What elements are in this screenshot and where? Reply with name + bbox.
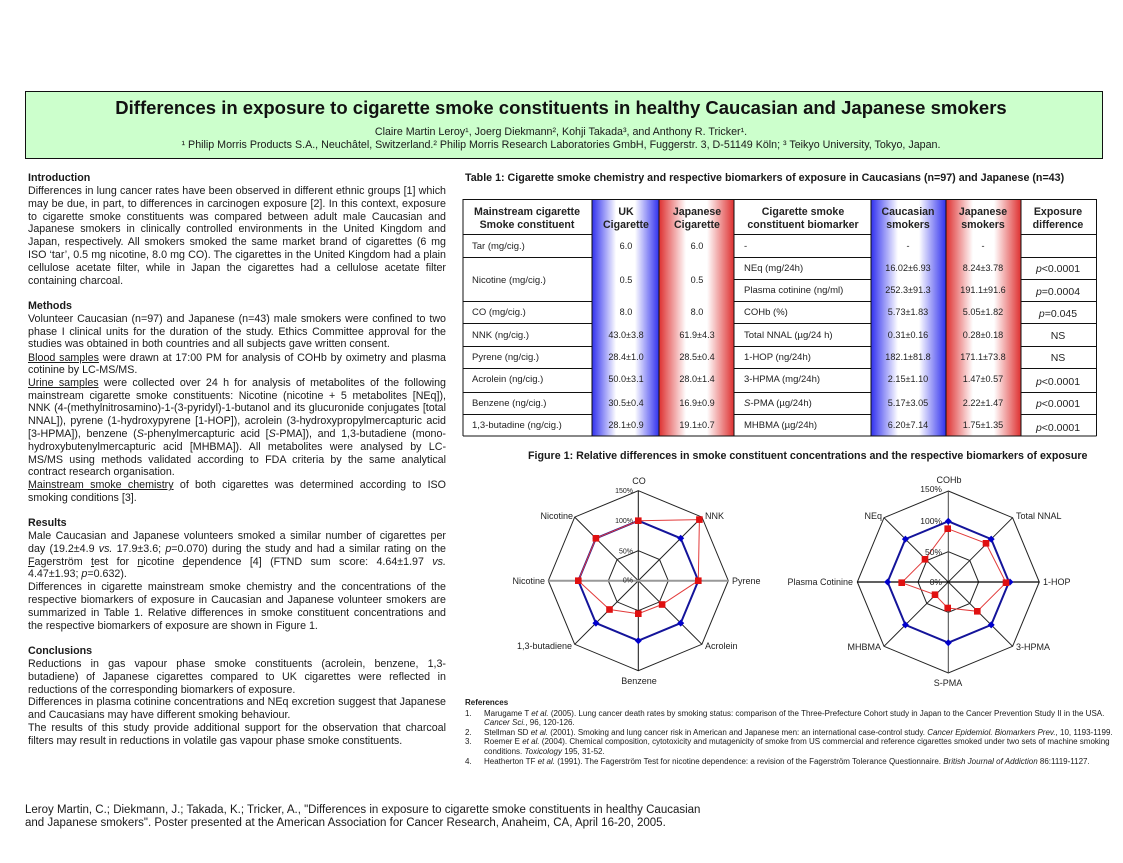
- scale labels: 50%: [925, 547, 942, 557]
- table header row: UK: [618, 206, 634, 218]
- row: nicotine: NEq (mg/24h): [744, 263, 803, 274]
- reference 1: [465, 708, 1104, 727]
- series: Caucasian smokers (blue): [884, 518, 1014, 646]
- reference 3: Roemer E et al. (2004). Chemical composition, cytotoxicity and mutagenicity of smoke from US commercial and reference cigarettes smoked under two sets of machine smoking: [484, 737, 1110, 746]
- table header row: Cigarette: [674, 219, 720, 231]
- text block: conclusions: reductions of the corresponding biomarkers of exposure.: [28, 684, 295, 696]
- row: NNK: [472, 330, 1065, 342]
- reference 4: Heatherton TF et al. (1991). The Fagerström Test for nicotine dependence: a revision of the Fagerström Tolerance Questionnaire. British Journal of Addiction 86:1119-1127.: [484, 756, 1090, 766]
- row: NNK: 61.9±4.3: [679, 330, 715, 340]
- text block: methods: contract research organisation.: [28, 466, 175, 478]
- row: benzene: 30.5±0.4: [608, 398, 644, 408]
- radar chart: smoke constituents: [512, 476, 761, 686]
- row: CO: 5.05±1.82: [963, 307, 1003, 317]
- row: acrolein: [472, 374, 1080, 388]
- row: CO: CO (mg/cig.): [472, 307, 526, 318]
- table header row: Japanese: [673, 206, 721, 218]
- text block: methods: mainstream cigarette smoke constituents: Nicotine (nicotine + 5 metabolites [NEq]),: [28, 390, 446, 402]
- text block: methods: NNK (4-(methylnitrosamino)-1-(3-pyridyl)-1-butanol and its glucuronide conjugates [total: [28, 402, 446, 414]
- table header row: Exposure: [1034, 206, 1082, 218]
- text block: results: summarized in Table 1. Relative differences in smoke constituent concentrations and: [28, 607, 446, 619]
- reference 1: Cancer Sci., 96, 120-126.: [484, 718, 575, 727]
- row: pyrene: 28.4±1.0: [608, 352, 644, 362]
- row: CO: 5.73±1.83: [888, 307, 928, 317]
- row: benzene: S-PMA (µg/24h): [744, 398, 812, 409]
- text block: methods: [3-HPMA]), benzene (S-phenylmercapturic acid [S-PMA]), and 1,3-butadiene (mono-: [28, 428, 446, 440]
- row: nicotine: Nicotine (mg/cig.): [472, 275, 546, 286]
- row: nicotine: 0.5: [691, 275, 703, 285]
- row: tar: -: [906, 241, 910, 251]
- panel: conclusions: [28, 645, 446, 747]
- panel: introduction: [28, 172, 446, 287]
- row: CO: [472, 307, 1077, 320]
- row: butadine: 6.20±7.14: [888, 420, 928, 430]
- reference 3: conditions. Toxicology 195, 31-52.: [484, 746, 605, 756]
- table header row: Smoke constituent: [480, 219, 575, 231]
- text block: conclusions: and Caucasians may have different smoking behaviour.: [28, 709, 290, 721]
- row: acrolein: Acrolein (ng/cig.): [472, 374, 543, 385]
- row: NNK: Total NNAL (µg/24 h): [744, 330, 833, 341]
- axis labels: 3-HPMA: [1016, 642, 1050, 652]
- row: nicotine: p=0.0004: [1035, 286, 1080, 298]
- text block: results: [28, 530, 446, 632]
- series: Japanese smokers (red): [898, 525, 1009, 615]
- row: pyrene: 171.1±73.8: [960, 352, 1006, 362]
- table header row: [474, 206, 1083, 231]
- scale labels: [615, 488, 633, 584]
- row: tar: -: [981, 241, 985, 251]
- scale labels: 150%: [615, 488, 633, 495]
- text block: methods: [28, 313, 446, 504]
- text block: methods: MS/MS using methods validated according to FDA criteria by the same analytical: [28, 454, 446, 466]
- series: UK cigarette (blue): [575, 517, 702, 644]
- axis labels: CO: [632, 476, 646, 486]
- table 1: [462, 199, 1097, 436]
- axis labels: [787, 475, 1071, 688]
- axis labels: Nicotine: [540, 511, 573, 521]
- row: acrolein: 28.0±1.4: [679, 374, 715, 384]
- axis labels: Benzene: [621, 676, 657, 686]
- panel: methods: [28, 300, 446, 504]
- table header row: smokers: [961, 219, 1005, 231]
- reference 1: Marugame T et al. (2005). Lung cancer death rates by smoking status: comparison of the Three-Prefecture Cohort study in Japan to the Cancer Prevention Study II in the USA.: [484, 708, 1104, 718]
- row: pyrene: Pyrene (ng/cig.): [472, 352, 539, 363]
- row: benzene: [472, 398, 1080, 410]
- title: Differences in exposure to cigarette smoke constituents in healthy Caucasian and Japanese smokers: [115, 97, 1007, 118]
- scale labels: 150%: [920, 484, 942, 494]
- row: tar: Tar (mg/cig.): [472, 241, 525, 252]
- row: butadine: MHBMA (µg/24h): [744, 420, 817, 431]
- table header row: Cigarette smoke: [762, 206, 844, 218]
- row: CO: p=0.045: [1038, 308, 1077, 320]
- text block: results: the respective biomarkers of exposure are shown in Figure 1.: [28, 620, 318, 632]
- references: [465, 698, 1113, 766]
- axis labels: NEq: [864, 511, 882, 521]
- text block: introduction: Differences in lung cancer rates have been observed in different ethnic groups [1] which: [28, 185, 446, 197]
- reference 2: Stellman SD et al. (2001). Smoking and lung cancer risk in American and Japanese men: an international case-control study. Cancer Epidemiol. Biomarkers Prev., 10, 1193-1199.: [484, 728, 1113, 736]
- series: Japanese cigarette (red): [575, 516, 703, 617]
- table header row: difference: [1033, 219, 1083, 231]
- row: benzene: Benzene (ng/cig.): [472, 398, 546, 409]
- row: nicotine: 191.1±91.6: [960, 285, 1006, 295]
- row: tar: 6.0: [691, 241, 703, 251]
- text block: introduction: ISO ‘tar’, 0.5 mg nicotine, 8.0 mg CO). The cigarettes in the United Kingdom had a plain: [28, 249, 446, 261]
- text block: results: Fagerström test for nicotine dependence [4] (FTND sum score: 4.64±1.97 vs.: [28, 556, 446, 568]
- table header row: Japanese: [959, 206, 1007, 218]
- axis labels: COHb: [936, 475, 962, 485]
- row: butadine: 28.1±0.9: [608, 420, 644, 430]
- text block: introduction: containing charcoal.: [28, 275, 123, 287]
- text block: methods: studies was obtained in both countries and all subjects gave written consent.: [28, 338, 390, 350]
- row: nicotine: [472, 263, 1080, 298]
- text block: results: Male Caucasian and Japanese volunteers smoked a similar number of cigarettes per: [28, 530, 446, 542]
- citation footer: [25, 804, 700, 829]
- row: acrolein: 50.0±3.1: [608, 374, 644, 384]
- row: tar: 6.0: [620, 241, 632, 251]
- text block: introduction: Japan, respectively. All smokers smoked the same market brand of cigarettes (6 mg: [28, 236, 446, 248]
- reference 3: 3.: [465, 737, 472, 746]
- heading: introduction: Introduction: [28, 172, 90, 184]
- row: butadine: p<0.0001: [1035, 422, 1080, 434]
- text block: conclusions: filters may result in reductions in volatile gas vapour phase smoke constituents.: [28, 735, 402, 747]
- row: NNK: NS: [1051, 330, 1065, 342]
- axis labels: 1-HOP: [1043, 577, 1071, 587]
- axis labels: NNK: [705, 511, 724, 521]
- text block: methods: cotinine by LC-MS/MS.: [28, 364, 137, 376]
- axis labels: Pyrene: [732, 576, 761, 586]
- row: butadine: 19.1±0.7: [679, 420, 715, 430]
- row: butadine: 1.75±1.35: [963, 420, 1003, 430]
- row: nicotine: 252.3±91.3: [885, 285, 931, 295]
- row: pyrene: 1-HOP (ng/24h): [744, 352, 811, 363]
- row: CO: COHb (%): [744, 307, 788, 318]
- axis labels: Nicotine: [512, 576, 545, 586]
- axis labels: S-PMA: [934, 678, 962, 688]
- row: CO: 8.0: [691, 307, 703, 317]
- scale labels: 100%: [920, 516, 942, 526]
- axis labels: [512, 476, 761, 686]
- text block: methods: Volunteer Caucasian (n=97) and Japanese (n=43) male smokers were confined to two: [28, 313, 446, 325]
- row: nicotine: Plasma cotinine (ng/ml): [744, 285, 843, 296]
- text block: conclusions: butadiene) of Japanese cigarettes compared to UK cigarettes were reflected in: [28, 671, 446, 683]
- row: nicotine: p<0.0001: [1035, 263, 1080, 275]
- row: pyrene: 182.1±81.8: [885, 352, 931, 362]
- text block: conclusions: [28, 658, 446, 747]
- references heading: References: [465, 698, 508, 707]
- axis labels: MHBMA: [848, 642, 881, 652]
- text block: results: 4.47±1.93; p=0.632).: [28, 568, 127, 580]
- text block: introduction: may be due, in part, to differences in carcinogen exposure [2]. In this context, exposure: [28, 198, 446, 210]
- reference 1: 1.: [465, 708, 472, 718]
- axis labels: Total NNAL: [1016, 511, 1062, 521]
- table header row: Cigarette: [603, 219, 649, 231]
- figure heading: Figure 1: Relative differences in smoke constituent concentrations and the respective biomarkers of exposure: [528, 450, 1087, 462]
- row: tar: -: [744, 241, 747, 252]
- text block: results: respective biomarkers of exposure in Caucasian and Japanese volunteer smokers are: [28, 594, 446, 606]
- row: benzene: 16.9±0.9: [679, 398, 715, 408]
- text block: introduction: Japanese smokers in clinically controlled environments in the United Kingdom and: [28, 223, 446, 235]
- text block: introduction: [28, 185, 446, 287]
- text block: introduction: to cigarette smoke constituents was compared between adult male Caucasian and: [28, 211, 446, 223]
- row: acrolein: 3-HPMA (mg/24h): [744, 374, 820, 385]
- row: benzene: p<0.0001: [1035, 398, 1080, 410]
- table header row: smokers: [886, 219, 930, 231]
- row: NNK: 0.31±0.16: [888, 330, 928, 340]
- radar chart: biomarkers of exposure: [787, 475, 1071, 688]
- text block: methods: NNAL]), pyrene (1-hydroxypyrene [1-HOP]), acrolein (3-hydroxypropylmercapturic acid: [28, 415, 446, 427]
- row: pyrene: NS: [1051, 352, 1065, 364]
- authors: Claire Martin Leroy¹, Joerg Diekmann², Kohji Takada³, and Anthony R. Tricker¹.: [375, 126, 747, 138]
- row: pyrene: [472, 352, 1065, 364]
- table heading: Table 1: Cigarette smoke chemistry and respective biomarkers of exposure in Caucasians (n=97) and Japanese (n=43): [465, 172, 1064, 184]
- title banner: [25, 91, 1103, 159]
- row: acrolein: p<0.0001: [1035, 376, 1080, 388]
- axis labels: Acrolein: [705, 641, 738, 651]
- heading: conclusions: Conclusions: [28, 645, 92, 657]
- reference 2: 2.: [465, 728, 472, 736]
- text block: conclusions: Differences in plasma cotinine concentrations and NEq excretion suggest that Japanese: [28, 696, 446, 708]
- text block: methods: hydroxybutenylmercapturic acid [MHBMA]). All metabolites were analysed by LC-: [28, 441, 446, 453]
- row: tar: [472, 241, 985, 252]
- scale labels: 50%: [619, 548, 633, 556]
- panel: results: [28, 517, 446, 632]
- row: butadine: [472, 420, 1080, 434]
- table header row: constituent biomarker: [747, 219, 859, 231]
- text block: methods: phase I clinical units for the duration of the study. Ethics Committee approval for the: [28, 326, 446, 338]
- text block: introduction: cellulose acetate filter, while in Japan the cigarettes had a cellulose acetate filter: [28, 262, 446, 274]
- scale labels: 0%: [623, 578, 633, 584]
- row: NNK: 43.0±3.8: [608, 330, 644, 340]
- axis labels: Plasma Cotinine: [787, 577, 853, 587]
- text block: conclusions: The results of this study provide additional support for the observation that charcoal: [28, 722, 446, 734]
- row: CO: 8.0: [620, 307, 632, 317]
- text block: conclusions: Reductions in gas vapour phase smoke constituents (acrolein, benzene, 1,3-: [28, 658, 446, 670]
- table header row: Caucasian: [882, 206, 934, 218]
- heading: methods: Methods: [28, 300, 72, 312]
- row: pyrene: 28.5±0.4: [679, 352, 715, 362]
- reference 3: [465, 737, 1110, 756]
- axis labels: 1,3-butadiene: [517, 641, 572, 651]
- text block: results: Differences in cigarette mainstream smoke chemistry and the concentrations of the: [28, 581, 446, 593]
- text block: methods: Mainstream smoke chemistry of both cigarettes was determined according to ISO: [28, 479, 446, 491]
- row: NNK: NNK (ng/cig.): [472, 330, 529, 341]
- text block: methods: Urine samples were collected over 24 h for analysis of metabolites of the following: [28, 377, 446, 389]
- affiliations: ¹ Philip Morris Products S.A., Neuchâtel, Switzerland.² Philip Morris Research Laboratories GmbH, Fuggerstr. 3, D-51149 Köln; ³ Teikyo University, Tokyo, Japan.: [182, 139, 940, 151]
- citation footer: and Japanese smokers". Poster presented at the American Association for Cancer Research, Anaheim, CA, April 16-20, 2005.: [25, 817, 666, 829]
- row: NNK: 0.28±0.18: [963, 330, 1003, 340]
- row: acrolein: 1.47±0.57: [963, 374, 1003, 384]
- row: butadine: 1,3-butadine (ng/cig.): [472, 420, 562, 431]
- row: benzene: 5.17±3.05: [888, 398, 928, 408]
- heading: results: Results: [28, 517, 67, 529]
- row: nicotine: 16.02±6.93: [885, 263, 931, 273]
- row: benzene: 2.22±1.47: [963, 398, 1003, 408]
- scale labels: 0%: [930, 577, 942, 587]
- text block: results: day (19.2±4.9 vs. 17.9±3.6; p=0.070) during the study and had a similar rating on the: [28, 543, 446, 555]
- row: nicotine: 8.24±3.78: [963, 263, 1003, 273]
- scale labels: [920, 484, 942, 587]
- scale labels: 100%: [615, 518, 633, 525]
- citation footer: Leroy Martin, C.; Diekmann, J.; Takada, K.; Tricker, A., "Differences in exposure to cigarette smoke constituents in healthy Caucasian: [25, 804, 700, 816]
- reference 4: 4.: [465, 756, 472, 766]
- table header row: Mainstream cigarette: [474, 206, 580, 218]
- row: nicotine: 0.5: [620, 275, 632, 285]
- text block: methods: Blood samples were drawn at 17:00 PM for analysis of COHb by oximetry and plasma: [28, 352, 446, 364]
- row: acrolein: 2.15±1.10: [888, 374, 928, 384]
- text block: methods: smoking conditions [3].: [28, 492, 137, 504]
